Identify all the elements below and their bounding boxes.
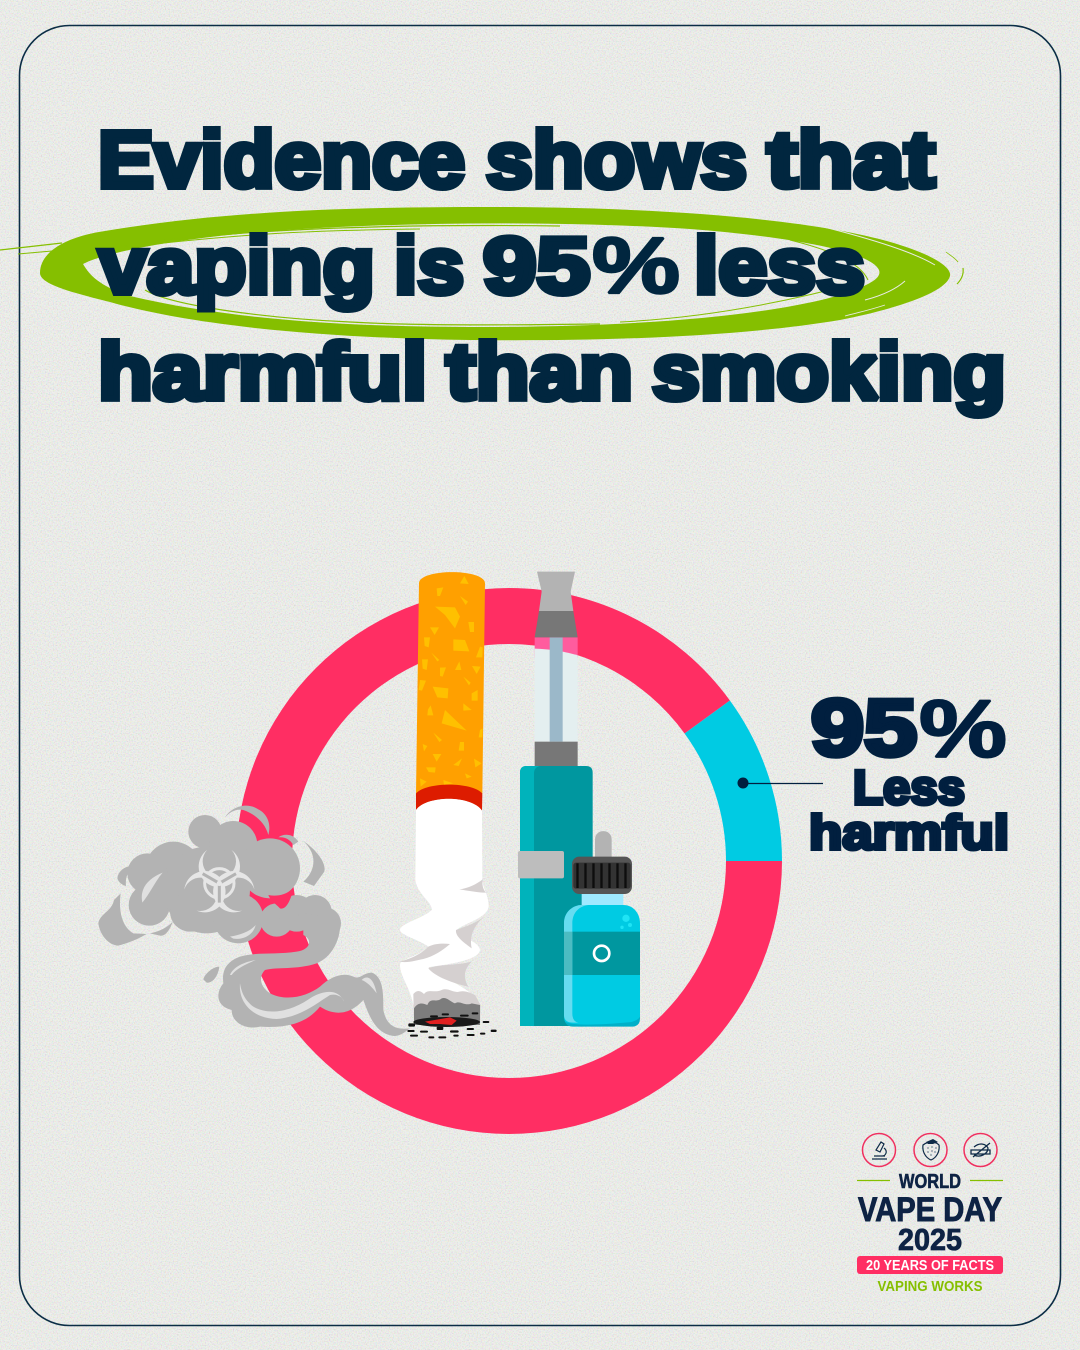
bottle bubbles — [622, 915, 630, 922]
logo icon: strawberry — [914, 1134, 947, 1166]
vape mouthpiece — [537, 572, 575, 611]
logo words: VAPE DAY: VAPE DAY — [858, 1191, 1002, 1229]
callout leader line — [738, 778, 823, 788]
logo word: WORLD: WORLD — [899, 1171, 961, 1193]
title line 1: that — [767, 115, 935, 204]
cigarette red band — [416, 785, 482, 811]
bottle neck — [582, 892, 623, 907]
ash — [413, 989, 481, 1025]
title line 2: vaping — [99, 221, 375, 310]
vape glass tank — [535, 637, 578, 657]
logo banner — [857, 1256, 1003, 1274]
title line 2: 95 — [483, 221, 590, 310]
title line 2: % — [592, 221, 680, 310]
title line 3: than — [446, 327, 633, 416]
icon: smoke cloud with biohazard — [98, 806, 410, 1036]
donut segment: 95% less harmful — [685, 700, 782, 861]
icon: e-liquid bottle — [564, 831, 640, 1027]
callout number: 95 — [811, 683, 917, 772]
title line 1: shows — [486, 115, 747, 204]
pink notch in cloud — [268, 888, 293, 909]
donut segment: harmful remainder — [236, 588, 782, 1134]
logo tagline: VAPING WORKS — [878, 1279, 983, 1295]
logo banner text: 20 YEARS OF FACTS — [866, 1258, 994, 1274]
callout: 95% less harmful — [809, 683, 1009, 860]
paper shadows — [400, 879, 486, 987]
logo side rules — [857, 1180, 1003, 1182]
logo icon: crossed-out cigarette — [964, 1134, 997, 1166]
icon: vape device — [518, 572, 593, 1026]
vape centre tube — [550, 637, 563, 742]
dropper — [595, 831, 612, 860]
title — [98, 115, 1006, 416]
vape button — [518, 851, 564, 878]
vape body — [520, 766, 593, 1026]
bottle cap — [572, 857, 632, 894]
cigarette filter — [416, 572, 485, 793]
vape base connector — [535, 742, 578, 766]
ash crumbs — [407, 1012, 497, 1038]
icon: burning cigarette — [400, 572, 497, 1038]
title line 3: harmful — [98, 327, 427, 416]
callout label line 2: harmful — [809, 807, 1009, 860]
title line 1: Evidence — [98, 115, 465, 204]
filter speckles — [419, 576, 483, 787]
bottle label band — [572, 932, 640, 975]
green brush circle highlight — [0, 207, 963, 340]
title line 2: is — [394, 221, 464, 310]
donut chart — [236, 588, 782, 1134]
logo: World Vape Day 2025 — [857, 1134, 1003, 1295]
logo icon: microscope — [862, 1134, 896, 1166]
callout number — [811, 683, 1007, 775]
title line 3 — [98, 327, 1006, 416]
cigarette paper and smoke curl — [400, 799, 489, 1005]
title line 2 — [99, 221, 865, 310]
callout number: % — [919, 684, 1007, 775]
bottle body — [564, 905, 640, 1026]
title line 1 — [98, 115, 935, 204]
logo year: 2025 — [898, 1222, 962, 1257]
title line 2: less — [694, 221, 865, 310]
callout label line 1: Less — [853, 762, 965, 815]
biohazard symbol — [180, 850, 259, 918]
title line 3: smoking — [652, 327, 1006, 416]
